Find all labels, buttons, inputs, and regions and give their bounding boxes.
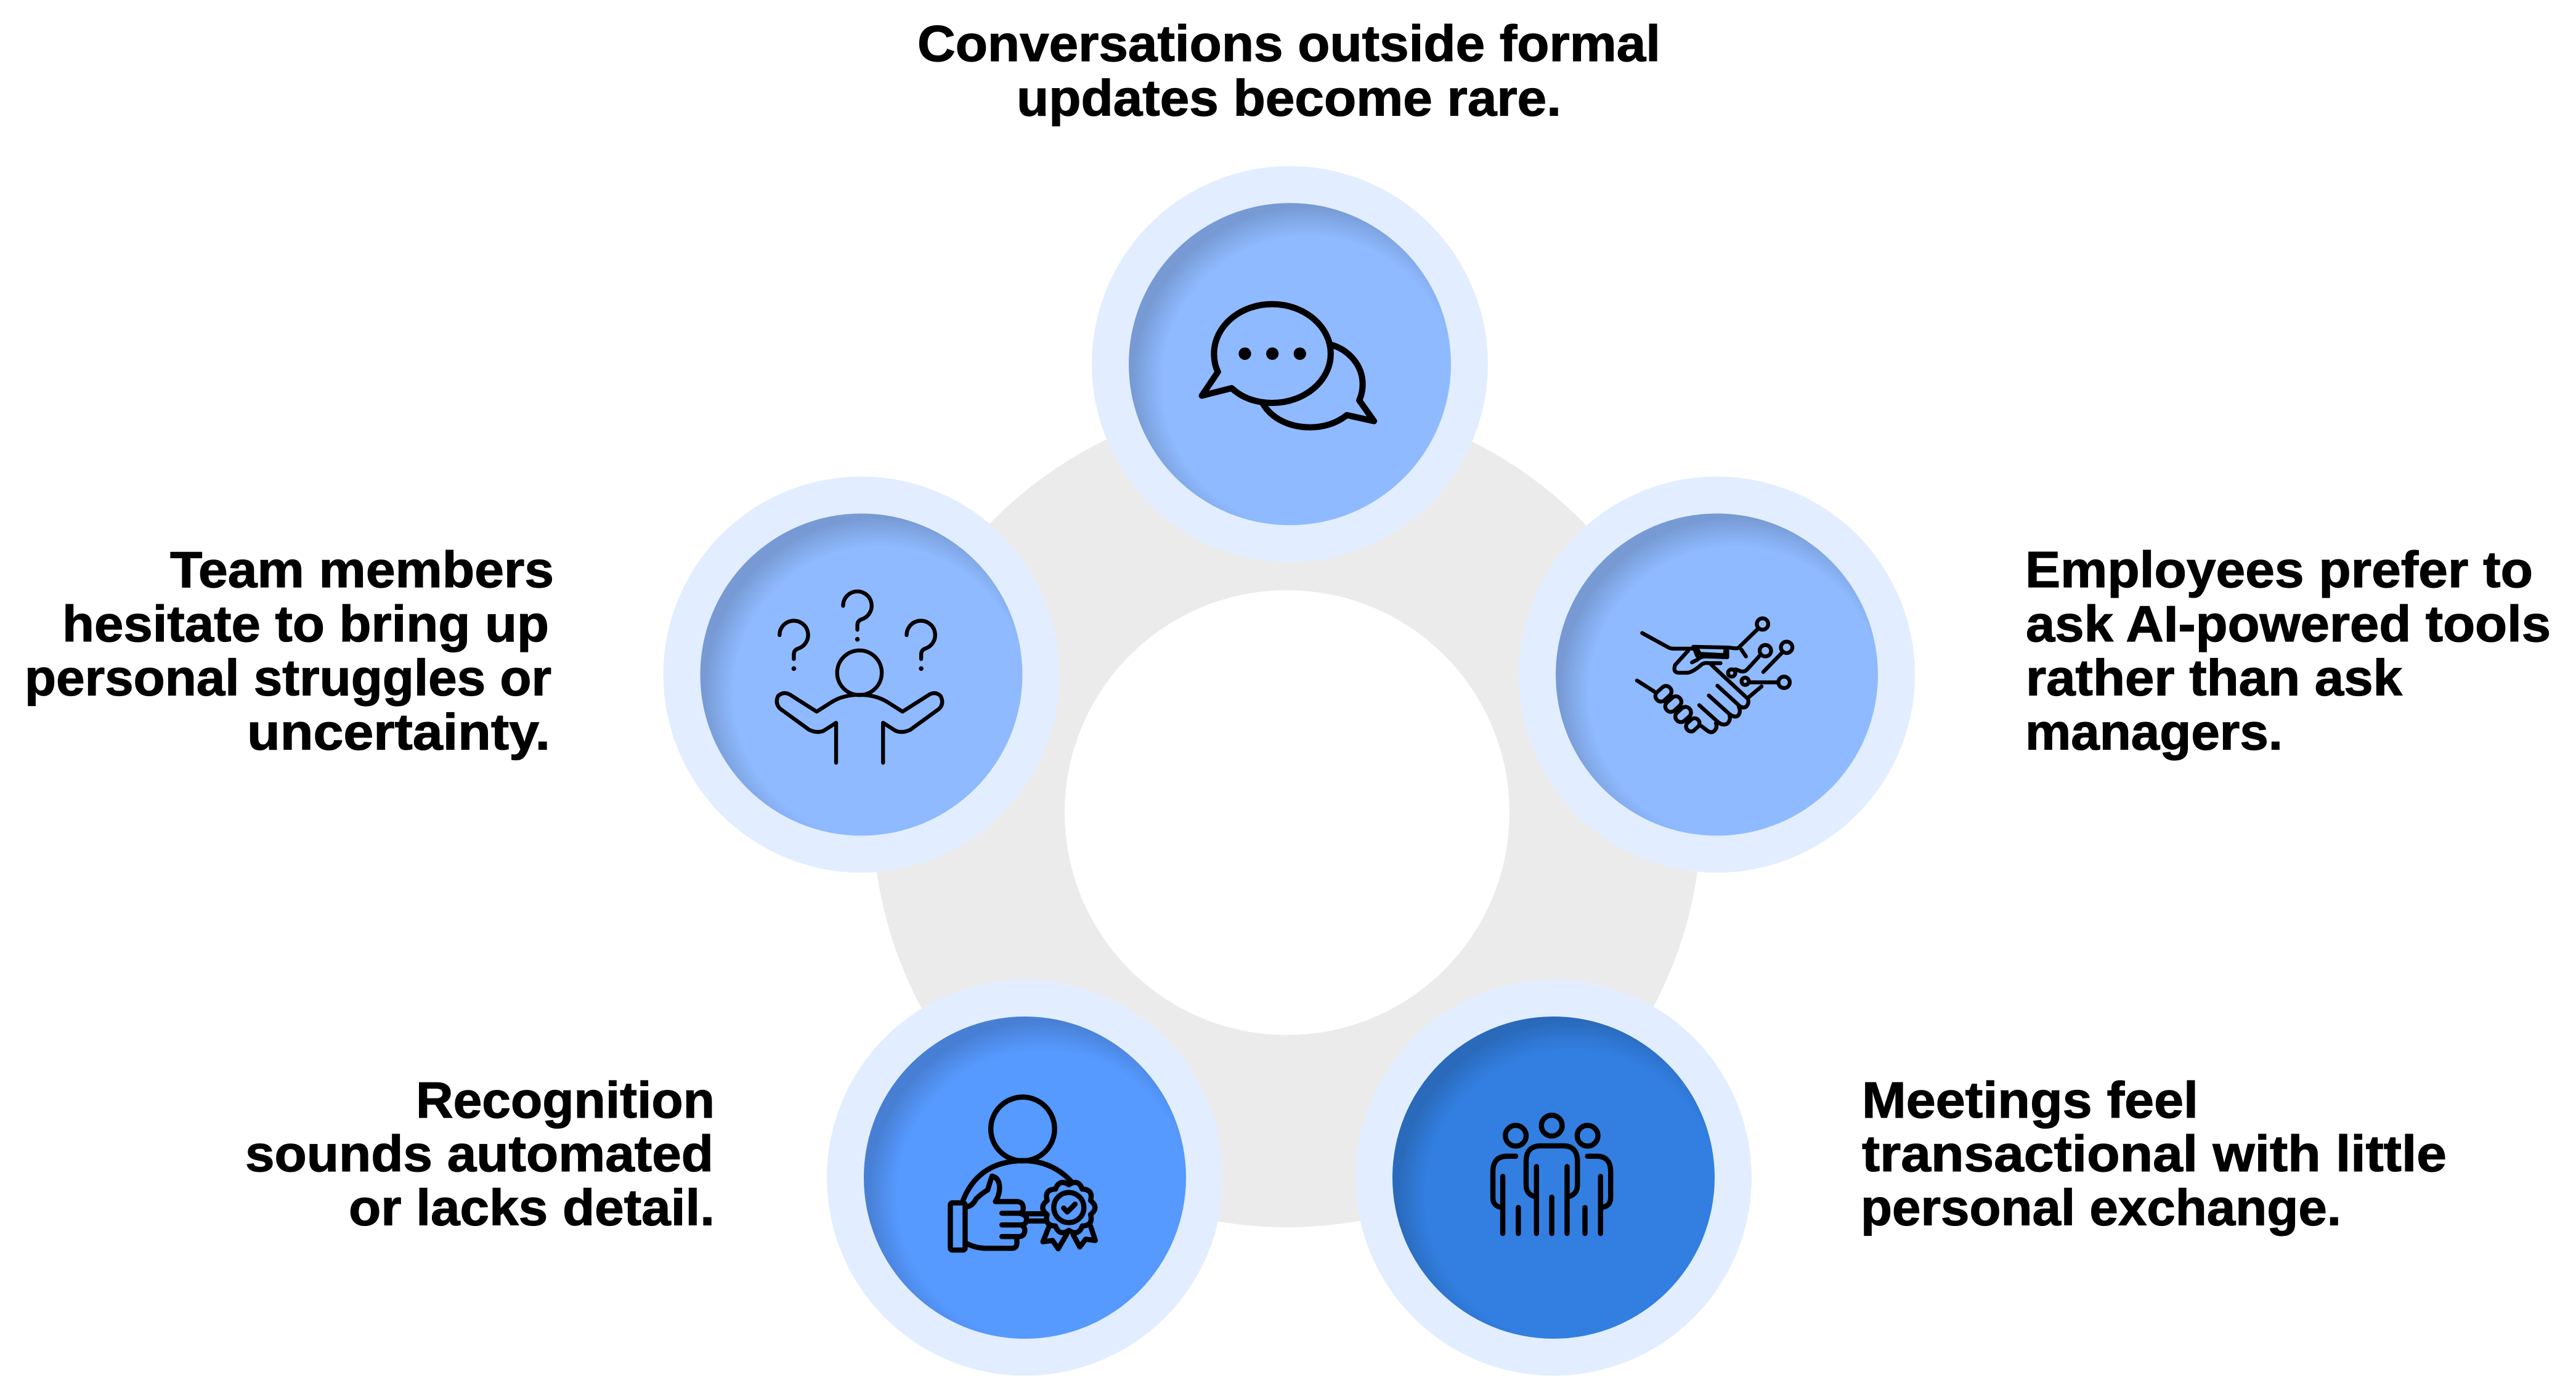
- text: recognition: or lacks detail.: [349, 1179, 715, 1236]
- text: meetings: personal exchange.: [1861, 1179, 2341, 1236]
- icon: chat bubbles: [1202, 304, 1374, 428]
- text: team members: Team members: [170, 541, 554, 598]
- text: recognition: Recognition: [416, 1071, 715, 1129]
- node: recognition (bottom left): [827, 980, 1223, 1376]
- text: team members: uncertainty.: [247, 704, 550, 760]
- text: recognition: sounds automated: [245, 1125, 713, 1182]
- node: uncertainty (left): [663, 477, 1060, 872]
- text: employees: [2025, 541, 2551, 760]
- node: AI handshake (right): [1519, 477, 1915, 872]
- text: meetings: transactional with little: [1862, 1125, 2447, 1182]
- node: conversations (top): [1092, 166, 1488, 562]
- icon: person with thumbs up and badge: [950, 1097, 1095, 1250]
- text: conversations: updates become rare.: [1017, 69, 1561, 127]
- text: employees: Employees prefer to: [2025, 541, 2533, 598]
- icon: person with question marks: [777, 591, 942, 763]
- text: employees: ask AI-powered tools: [2026, 595, 2551, 652]
- text: team members: [25, 541, 554, 760]
- text: meetings: Meetings feel: [1862, 1071, 2198, 1129]
- text: conversations: [917, 15, 1660, 127]
- icon: team of three people: [1493, 1115, 1611, 1233]
- text: employees: rather than ask: [2026, 649, 2403, 706]
- text: team members: personal struggles or: [25, 649, 551, 706]
- central grey ring: [872, 398, 1702, 1227]
- text: team members: hesitate to bring up: [62, 595, 549, 652]
- text: employees: managers.: [2025, 704, 2283, 760]
- text: meetings: [1861, 1071, 2447, 1236]
- node: meetings (bottom right): [1355, 980, 1752, 1376]
- text: conversations: Conversations outside formal: [917, 15, 1660, 72]
- text: recognition: [245, 1071, 715, 1236]
- icon: handshake with circuit nodes: [1637, 619, 1792, 733]
